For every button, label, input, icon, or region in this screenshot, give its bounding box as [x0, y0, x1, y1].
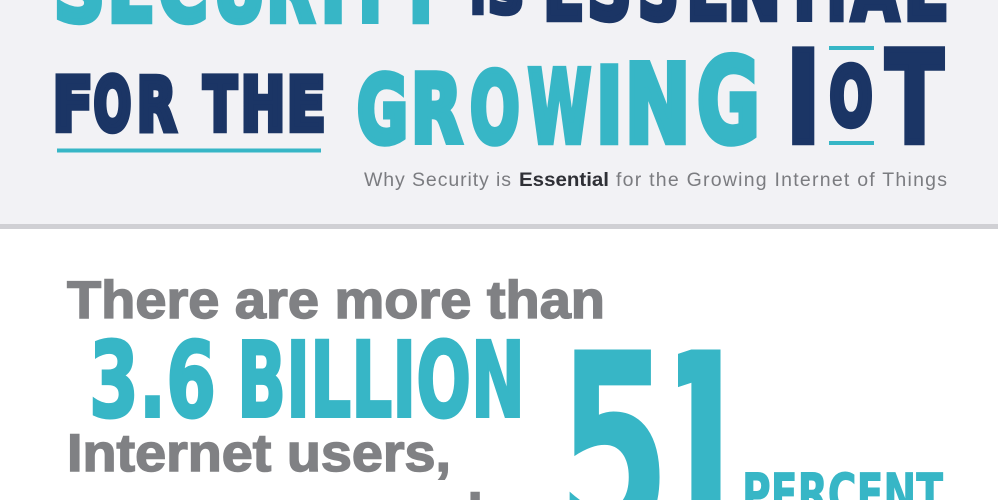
title: FOR THE: T: [204, 63, 237, 148]
title: GROWING: N: [625, 43, 691, 168]
title: GROWING: G: [697, 33, 760, 170]
subtitle: Why Security is: [364, 169, 511, 191]
title: GROWING: I: [596, 47, 623, 167]
title: ESSENTIAL: [543, 0, 946, 40]
title: FOR THE: O: [94, 63, 131, 148]
stat: 51 percent: [570, 350, 944, 500]
stat: 3.6 billion: BILLION: [237, 320, 525, 442]
title: FOR THE: F: [53, 63, 93, 148]
title: GROWING: [357, 33, 760, 170]
title: FOR THE: H: [241, 63, 285, 148]
header panel: [0, 0, 998, 229]
title: SECURITY: [54, 0, 445, 42]
text block: internet users intro: There are more than: [67, 271, 605, 330]
title: IoT: T: [886, 24, 943, 172]
text block: internet users intro: [67, 271, 605, 500]
stat: 3.6 billion: [89, 320, 525, 442]
text block: internet users intro: Internet users,: [67, 424, 451, 483]
title: FOR THE: R: [137, 63, 176, 148]
title: FOR THE: [53, 63, 326, 148]
title: GROWING: G: [357, 56, 408, 164]
subtitle: for the Growing Internet of Things: [616, 169, 947, 191]
subtitle: [364, 169, 947, 191]
title: GROWING: O: [470, 52, 520, 165]
subtitle: Essential: [519, 169, 609, 191]
title: GROWING: R: [411, 56, 462, 165]
title: IoT: I: [786, 24, 820, 172]
title: FOR THE: E: [287, 63, 326, 148]
stat: 3.6 billion: 3.6: [89, 320, 216, 442]
title: IoT: O: [830, 51, 872, 144]
title: is: [471, 0, 522, 29]
title: IoT: [786, 24, 943, 172]
title: GROWING: W: [528, 51, 591, 166]
underline below FOR THE: [57, 148, 321, 152]
